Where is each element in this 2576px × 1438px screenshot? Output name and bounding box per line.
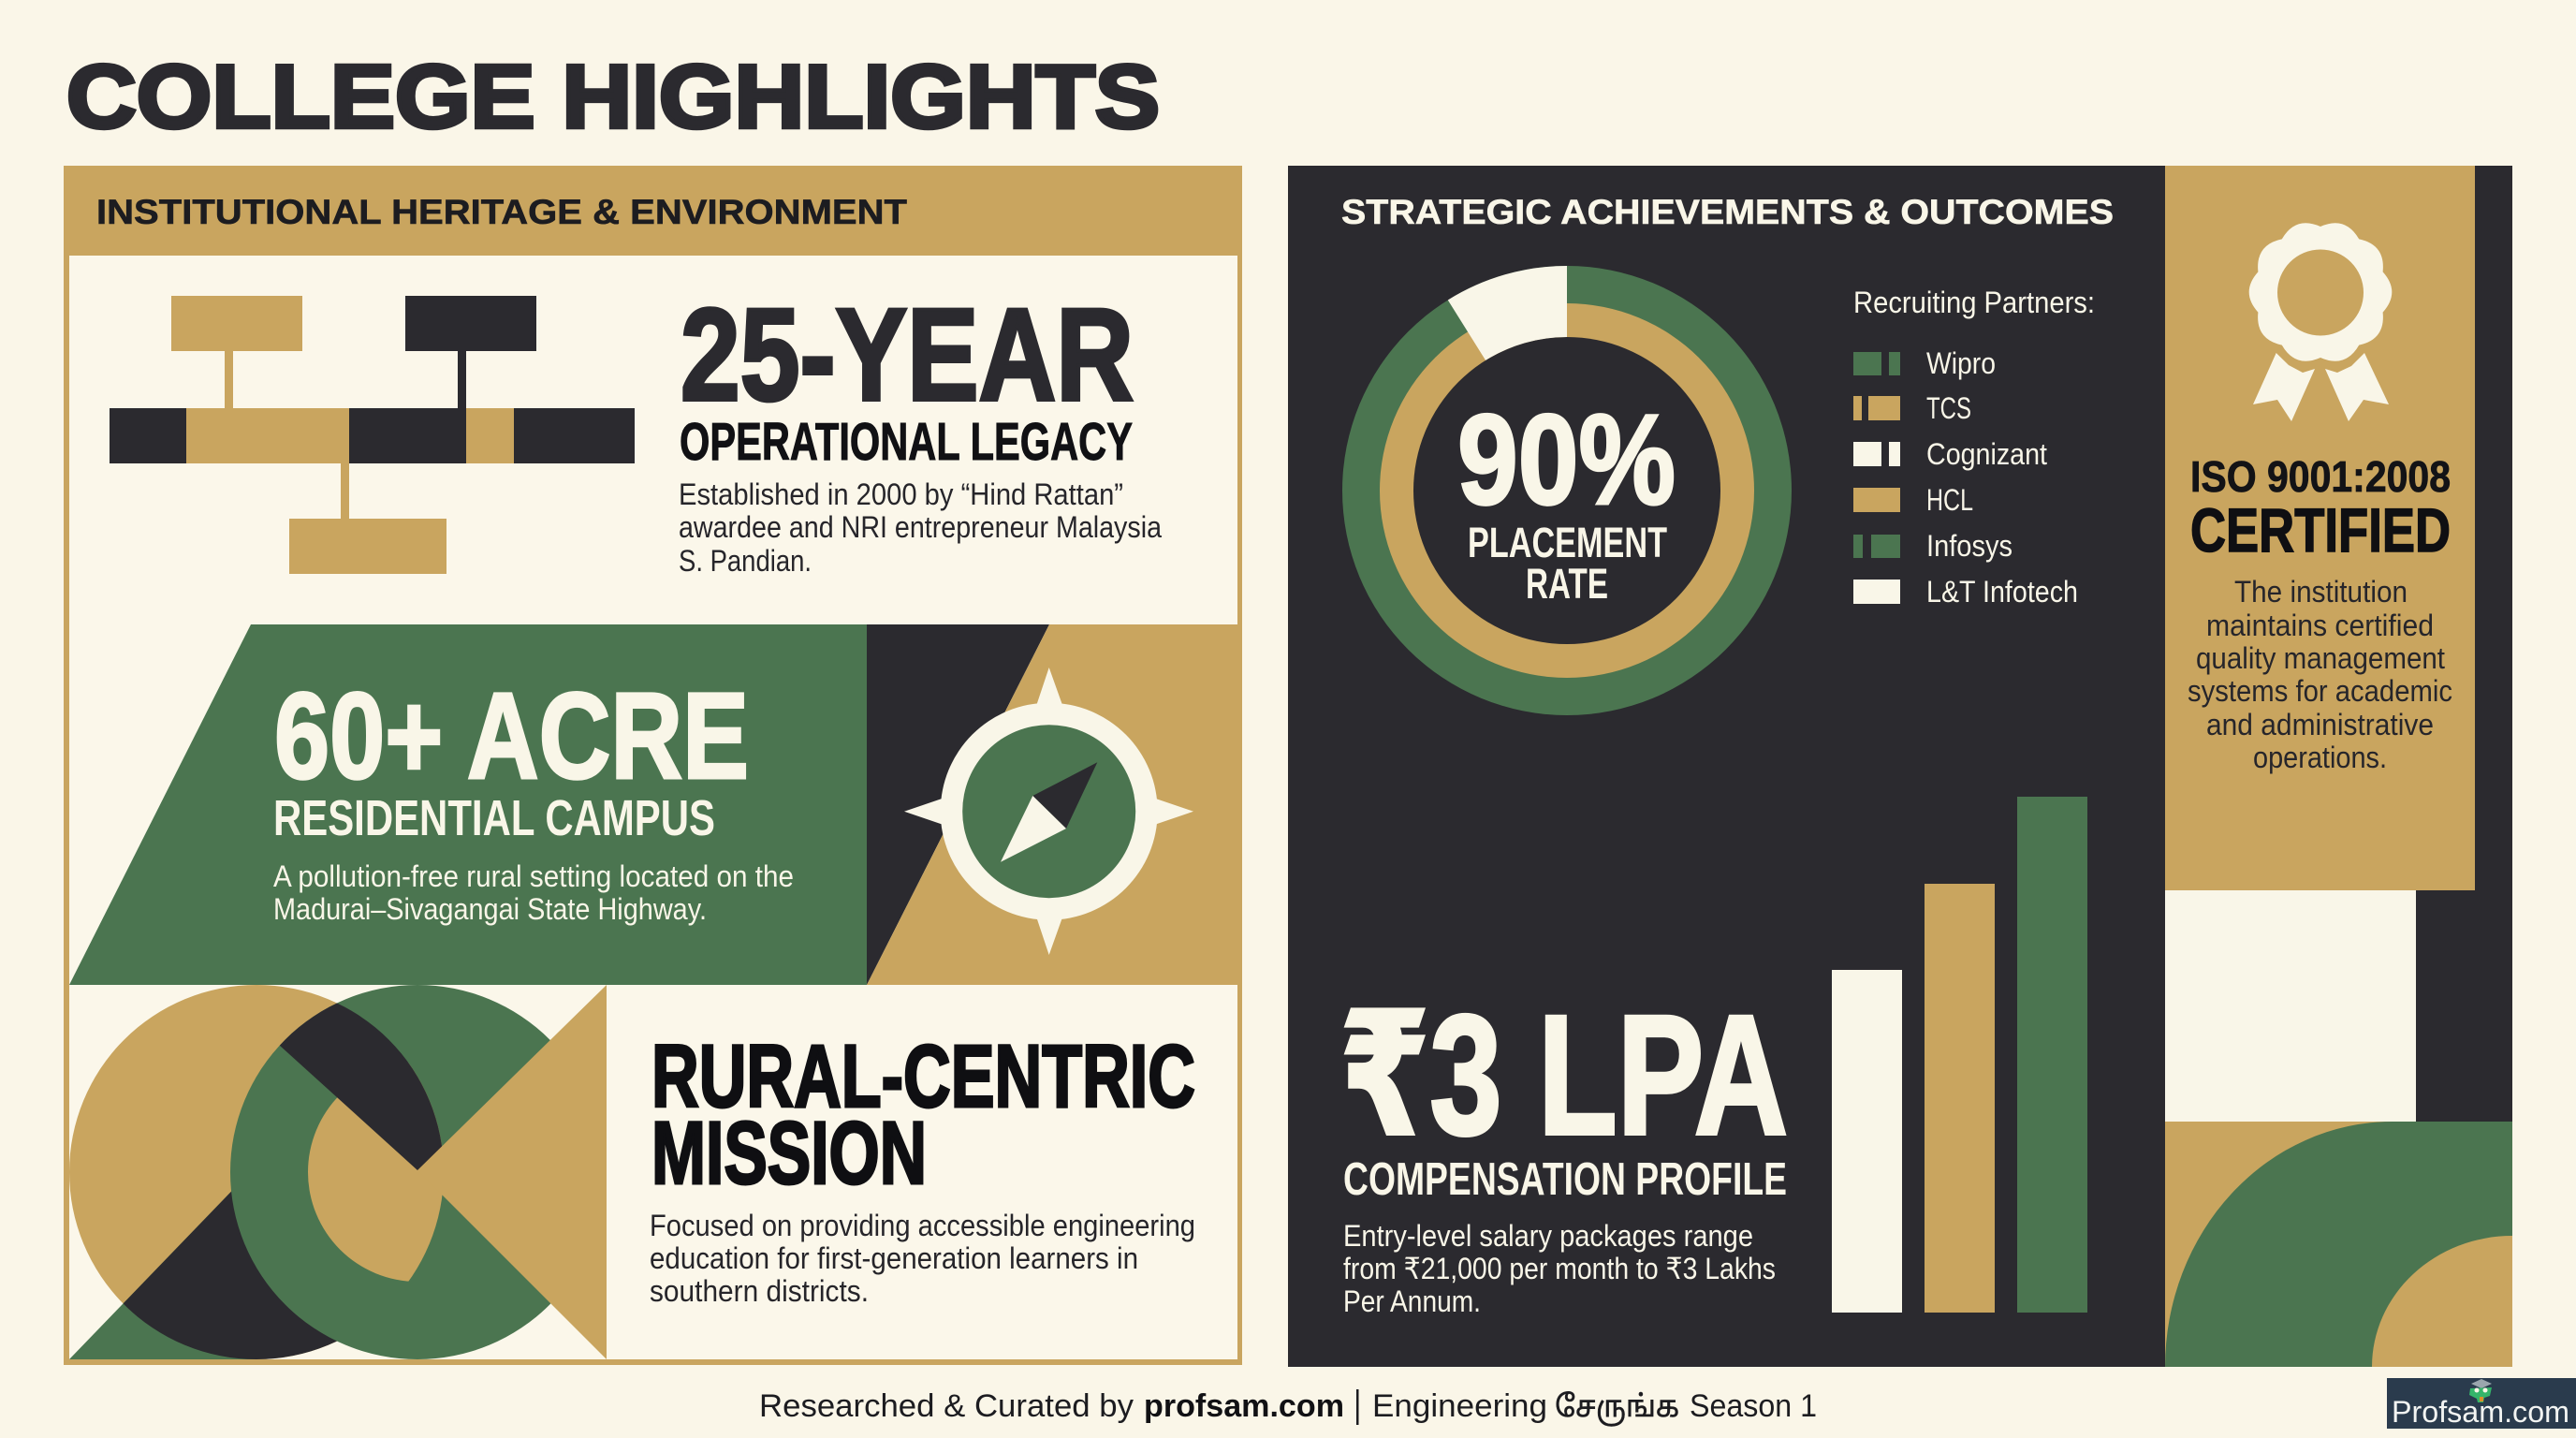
campus description [273, 859, 794, 926]
footer credit [759, 1388, 1817, 1428]
compensation description: from ₹21,000 per month to ₹3 Lakhs [1343, 1252, 1776, 1285]
title: COLLEGE HIGHLIGHTS [66, 47, 1160, 147]
legend item: L&T Infotech [1853, 575, 2078, 609]
compensation description [1343, 1219, 1776, 1318]
dark panel background [1288, 166, 2512, 1367]
icon: rosette badge [2249, 223, 2392, 421]
bar chart [1832, 797, 2087, 1313]
legend heading: Recruiting Partners: [1853, 286, 2095, 319]
certification description: maintains certified [2206, 609, 2434, 642]
icon: compass [904, 668, 1193, 955]
icon: timeline blocks [110, 296, 635, 574]
heading: rural-centric mission: RURAL-CENTRIC [651, 1027, 1195, 1126]
decorative block: green arch [2165, 1122, 2512, 1367]
legacy card [69, 256, 1237, 624]
panel: strategic achievements and outcomes [1288, 166, 2512, 1367]
certification description: systems for academic [2188, 674, 2452, 708]
legend: recruiting partners [1853, 286, 2095, 609]
donut chart: placement rate [1342, 266, 1792, 715]
logo wordmark: Profsam.com [2392, 1395, 2569, 1429]
decorative block: cream square [2165, 890, 2416, 1122]
legend item: Infosys: Infosys [1926, 529, 2012, 563]
label: placement rate: PLACEMENT [1468, 519, 1667, 566]
footer credit: profsam.com [1144, 1388, 1344, 1424]
mission description: education for first-generation learners in [650, 1241, 1138, 1275]
legend item: TCS: TCS [1926, 391, 1971, 425]
panel heading: STRATEGIC ACHIEVEMENTS & OUTCOMES [1341, 193, 2114, 231]
logo: Profsam.com [2387, 1378, 2576, 1429]
mission card [69, 985, 1237, 1359]
label: ISO 9001:2008: ISO 9001:2008 [2190, 452, 2451, 501]
mission description: Focused on providing accessible engineering [650, 1209, 1195, 1242]
legend item: HCL: HCL [1926, 483, 1973, 517]
certification column [2165, 166, 2475, 890]
stat: 25-year: 25-YEAR [681, 281, 1134, 428]
legacy description: S. Pandian. [679, 544, 812, 578]
icon: mascot with graduation cap [2469, 1379, 2492, 1402]
heading: rural-centric mission [651, 1027, 1195, 1203]
compensation description: Per Annum. [1343, 1284, 1481, 1318]
mission description: southern districts. [650, 1274, 869, 1308]
subheading: operational legacy: OPERATIONAL LEGACY [680, 412, 1133, 472]
panel heading: INSTITUTIONAL HERITAGE & ENVIRONMENT [96, 193, 907, 231]
legend item: TCS [1853, 391, 1971, 425]
legend item: Infosys [1853, 529, 2012, 563]
certification description: operations. [2253, 741, 2387, 774]
footer credit: Researched & Curated by [759, 1388, 1134, 1424]
icon: interlocking circles [69, 985, 607, 1359]
label: placement rate [1468, 519, 1667, 608]
stat: 3 LPA: ₹3 LPA [1339, 979, 1788, 1170]
campus band [69, 624, 1242, 985]
panel: institutional heritage and environment [64, 166, 1242, 1365]
campus description: A pollution-free rural setting located on the [273, 859, 794, 893]
label: certified: CERTIFIED [2190, 495, 2451, 565]
mission description [650, 1209, 1195, 1308]
certification description: and administrative [2206, 708, 2434, 741]
compensation description: Entry-level salary packages range [1343, 1219, 1753, 1253]
subheading: compensation profile: COMPENSATION PROFILE [1343, 1154, 1787, 1205]
legend item: Cognizant: Cognizant [1926, 437, 2047, 471]
legacy description: awardee and NRI entrepreneur Malaysia [679, 510, 1162, 544]
footer credit: Season 1 [1690, 1388, 1817, 1424]
certification description: quality management [2196, 641, 2445, 675]
campus description: Madurai–Sivagangai State Highway. [273, 892, 707, 926]
heading: rural-centric mission: MISSION [651, 1104, 927, 1203]
footer credit: Engineering [1372, 1388, 1547, 1424]
legacy description: Established in 2000 by “Hind Rattan” [679, 477, 1123, 511]
subheading: residential campus: RESIDENTIAL CAMPUS [273, 790, 715, 846]
panel frame [64, 166, 1242, 1365]
certification description: The institution [2234, 575, 2408, 609]
stat: 60+ acre: 60+ ACRE [274, 667, 749, 804]
legend item: Wipro: Wipro [1926, 346, 1996, 380]
legend item: L&T Infotech: L&T Infotech [1926, 575, 2078, 609]
legacy description [679, 477, 1162, 578]
label: placement rate: RATE [1526, 560, 1608, 608]
legend item: HCL [1853, 483, 1973, 517]
certification description [2188, 575, 2452, 774]
legend item: Cognizant [1853, 437, 2047, 471]
footer credit: சேருங்க [1555, 1390, 1679, 1428]
legend item: Wipro [1853, 346, 1996, 380]
stat: 90%: 90% [1457, 389, 1676, 532]
